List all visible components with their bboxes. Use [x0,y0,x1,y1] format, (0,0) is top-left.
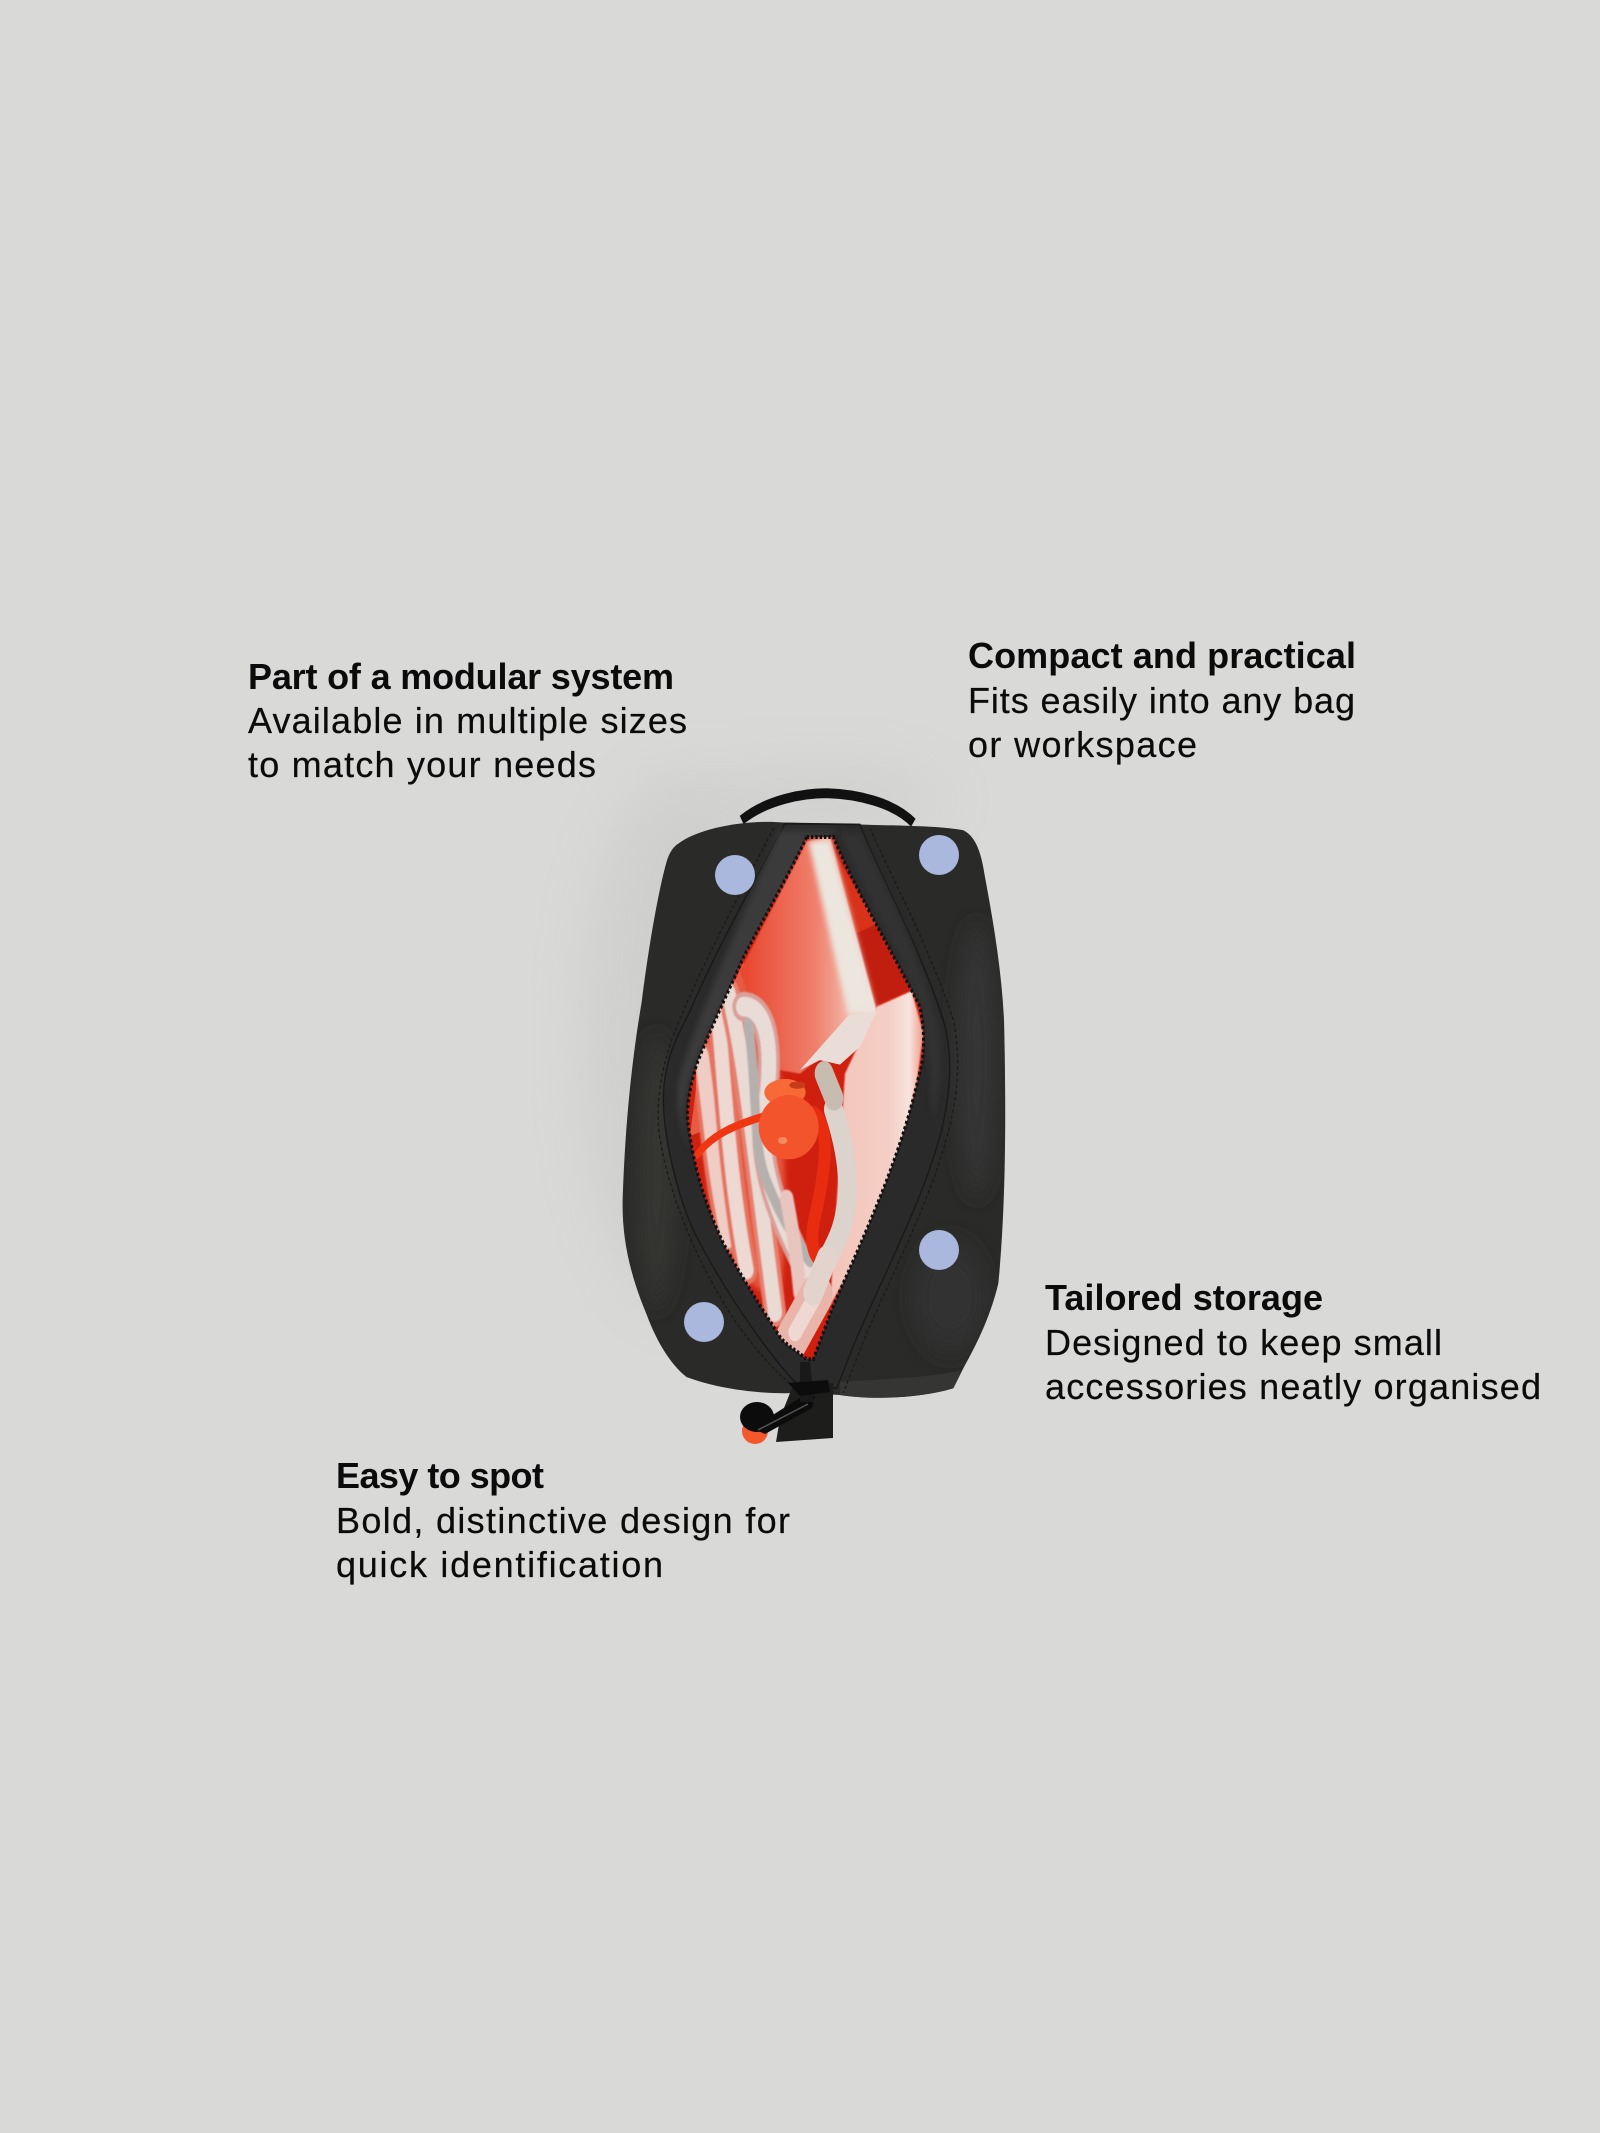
line 2: accessories neatly organised [1045,1366,1541,1407]
line 2: or workspace [968,724,1197,765]
fabric shading [637,926,997,1399]
pouch interior [680,828,927,1364]
black zip pull [740,1362,830,1434]
line 1: Available in multiple sizes [248,700,687,741]
line 1: Bold, distinctive design for [336,1500,790,1541]
marker dot: top right [919,835,959,875]
band highlights [678,830,840,1154]
line 2: quick identification [336,1544,663,1585]
pouch illustration [623,793,1005,1444]
callout: easy to spot [336,1455,790,1585]
callout: tailored storage [1045,1277,1541,1407]
line 1: Designed to keep small [1045,1322,1442,1363]
left lining [690,962,756,1136]
orange cord lock [759,1079,819,1159]
callout: part of a modular system [248,656,687,785]
coiled cable [702,993,810,1312]
soft shadow behind pouch [585,770,950,1310]
pouch body [623,822,1005,1398]
zipper teeth [688,837,924,1359]
adapter plug block [800,1011,877,1070]
marker dot: top left [715,855,755,895]
marker dot: lower left [684,1302,724,1342]
heading: Easy to spot [336,1455,544,1496]
line 1: Fits easily into any bag [968,680,1355,721]
marker dot: lower right [919,1230,959,1270]
white cable [788,1074,847,1346]
upper dark red lining [833,841,913,1004]
pale lining behind cables [694,1071,788,1294]
orange zip pull tip [742,1418,768,1444]
elastic cord [697,1114,825,1259]
handle loop [742,793,913,823]
power adapter [740,837,877,1074]
pouch in stretched crop coordinates [623,793,1005,1399]
heading: Tailored storage [1045,1277,1323,1318]
zipper rubber band [663,824,950,1388]
heading: Compact and practical [968,635,1356,676]
callout: compact and practical [968,635,1356,765]
zip strap [776,1383,833,1442]
second adapter [830,991,923,1306]
outer stitching [658,828,958,1393]
line 2: to match your needs [248,744,596,785]
heading: Part of a modular system [248,656,674,697]
right band highlight [840,833,940,1118]
